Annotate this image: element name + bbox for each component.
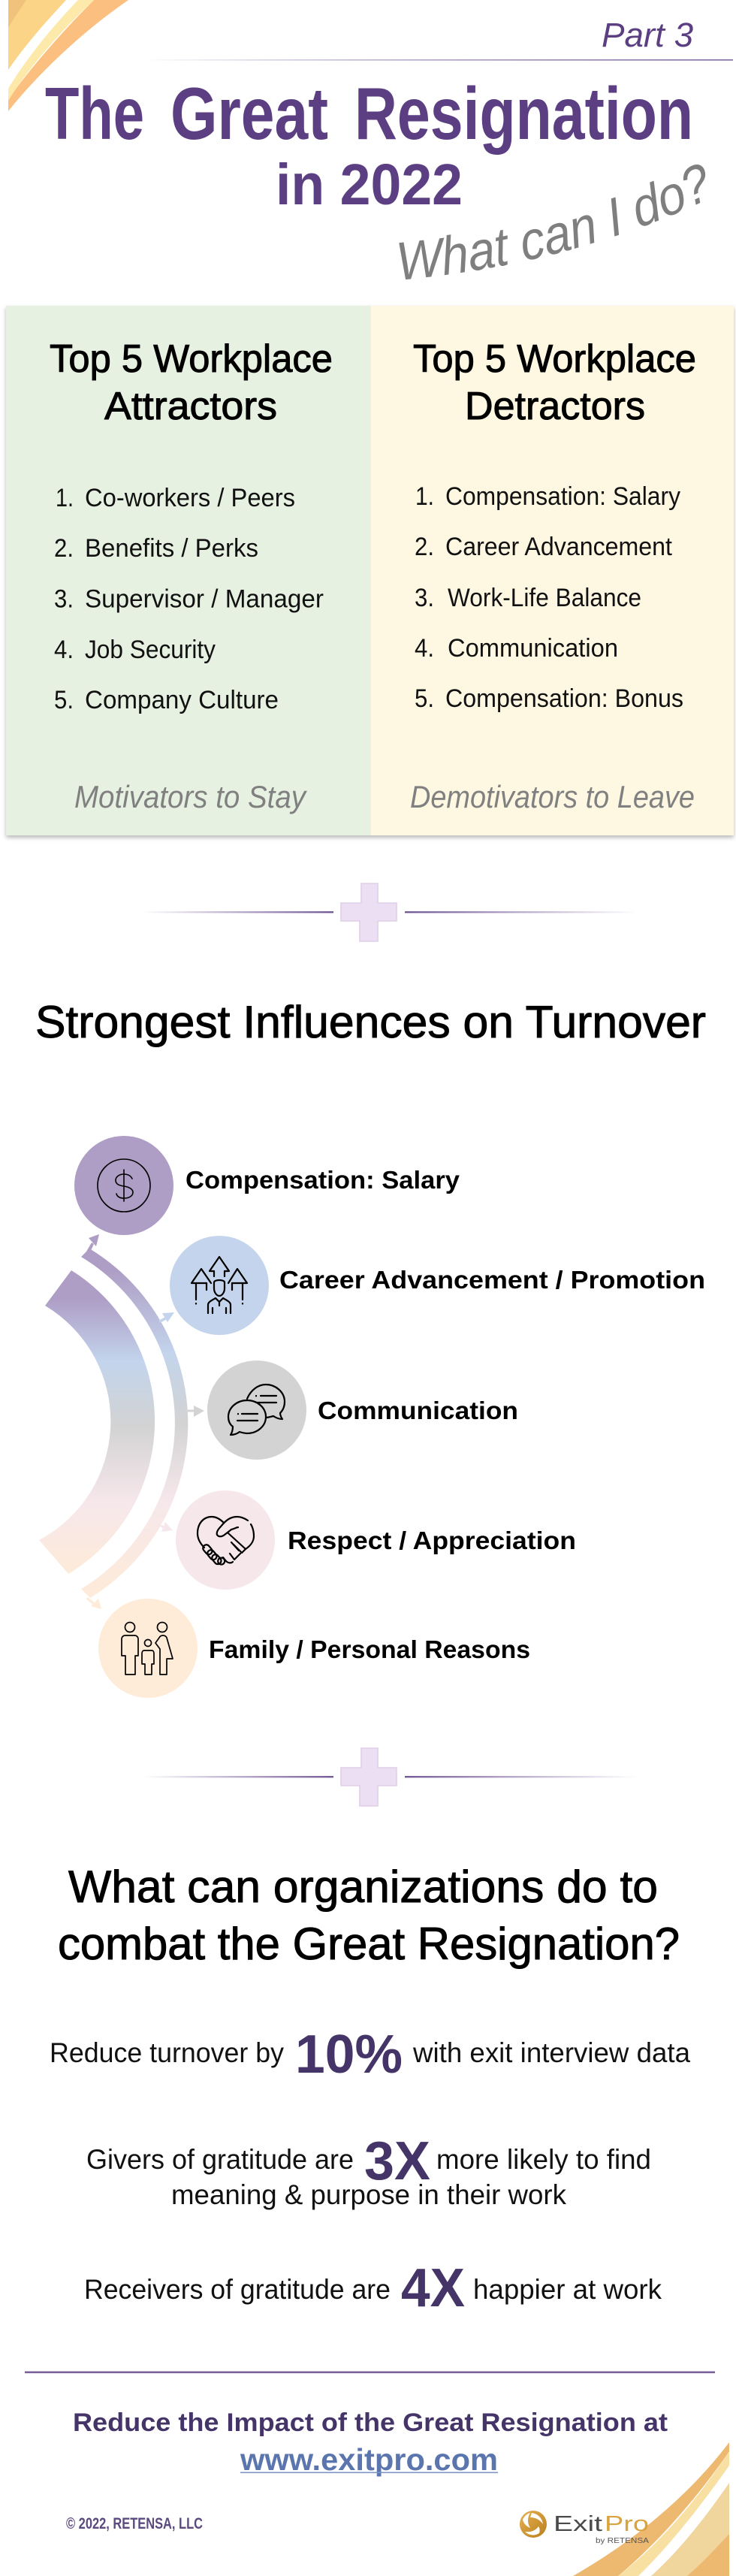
- arrow: to family: [86, 1597, 101, 1609]
- stat: reduce turnover by 10%: with exit interview data: [412, 2037, 690, 2068]
- thick arc: [39, 1270, 155, 1574]
- icon: logo mark: [520, 2511, 547, 2538]
- logo: ExitPro by Retensa: [520, 2511, 649, 2545]
- item: career advancement: Career Advancement / Promotion: [279, 1266, 705, 1294]
- item: communication: [207, 1360, 518, 1460]
- panel: detractors text: Work-Life Balance: [448, 584, 641, 612]
- stat: receivers of gratitude 4X: 4X: [401, 2258, 465, 2318]
- panel: attractors text: Job Security: [85, 636, 216, 664]
- icon: person with rising arrows: [192, 1257, 247, 1313]
- call to action: www.exitpro.com: [240, 2442, 498, 2477]
- title: [45, 72, 693, 217]
- item: respect appreciation: [176, 1490, 576, 1590]
- text: Part 3: Part 3: [602, 16, 693, 54]
- item: family personal reasons: Family / Personal Reasons: [209, 1635, 530, 1663]
- item: compensation salary: Compensation: Salary: [186, 1166, 460, 1194]
- title: in 2022: [276, 153, 463, 217]
- panel: detractors text: Compensation: Bonus: [445, 684, 683, 713]
- arrow: to communication: [188, 1406, 204, 1417]
- decorative rule under part label: [143, 59, 733, 61]
- panel: attractors text: Company Culture: [85, 686, 279, 714]
- call to action: Reduce the Impact of the Great Resignation at: [73, 2408, 668, 2437]
- panel: attractors text: 4.: [54, 636, 74, 664]
- thin arc: [81, 1249, 188, 1598]
- panel: detractors text: Top 5 Workplace: [413, 337, 696, 381]
- panel: attractors text: Benefits / Perks: [85, 534, 258, 563]
- panel: attractors text: 2.: [54, 534, 74, 563]
- panel: attractors text: Top 5 Workplace: [50, 337, 333, 381]
- panel: detractors text: Career Advancement: [445, 533, 673, 561]
- divider line: [25, 2371, 715, 2373]
- panel: detractors text: Detractors: [465, 385, 645, 428]
- divider: plus one: [143, 883, 637, 941]
- stat: receivers of gratitude 4X: happier at work: [473, 2274, 662, 2305]
- panel: detractors text: Demotivators to Leave: [410, 779, 695, 814]
- stat: givers of gratitude 3X: more likely to find: [436, 2144, 651, 2175]
- stat: givers of gratitude 3X: Givers of gratitude are: [86, 2144, 354, 2175]
- stat: reduce turnover by 10%: Reduce turnover by: [50, 2037, 284, 2068]
- item: respect appreciation: Respect / Appreciation: [288, 1527, 576, 1554]
- heading: what can organizations do: [58, 1862, 680, 1969]
- stat: receivers of gratitude 4X: Receivers of gratitude are: [84, 2274, 391, 2305]
- divider: plus two: [143, 1748, 637, 1806]
- arrow: to career: [158, 1312, 174, 1323]
- panel: attractors text: 3.: [54, 584, 74, 613]
- panel: detractors text: 2.: [415, 533, 434, 561]
- panel: detractors background: [371, 306, 734, 835]
- panel: attractors text: [50, 337, 333, 814]
- heading: strongest influences: Strongest Influences on Turnover: [35, 997, 706, 1047]
- panel: detractors text: 3.: [415, 584, 434, 612]
- stat: givers of gratitude 3X: meaning & purpose in their work: [171, 2179, 566, 2210]
- arrow: to compensation: [86, 1234, 99, 1254]
- panel: attractors text: Attractors: [104, 385, 277, 428]
- panel: detractors text: 5.: [415, 684, 434, 713]
- panel: attractors text: 1.: [56, 484, 74, 512]
- panel: attractors and detractors: [6, 306, 734, 835]
- item: career advancement: [170, 1236, 705, 1335]
- panel: attractors text: Motivators to Stay: [74, 779, 308, 814]
- stat: givers of gratitude 3X: 3X: [364, 2131, 430, 2191]
- decoration: bottom-right corner swoosh: [573, 2442, 729, 2576]
- logo: ExitPro by Retensa: by RETENSA: [596, 2536, 649, 2545]
- panel: detractors text: 1.: [415, 482, 434, 511]
- arrow: to respect: [156, 1522, 173, 1532]
- call to action: [73, 2408, 668, 2477]
- decoration: top-left corner swoosh: [8, 0, 128, 111]
- icon: dollar coin: [98, 1159, 150, 1212]
- item: communication: Communication: [318, 1397, 518, 1424]
- heading: what can organizations do: What can organizations do to: [68, 1862, 658, 1912]
- panel: attractors text: Supervisor / Manager: [85, 584, 324, 613]
- title: Great: [170, 72, 328, 155]
- icon: family: [122, 1623, 173, 1675]
- heading: what can organizations do: combat the Great Resignation?: [58, 1919, 680, 1969]
- item: family personal reasons: [98, 1599, 530, 1698]
- stat: reduce turnover by 10%: [50, 2025, 690, 2085]
- panel: attractors text: 5.: [54, 686, 74, 714]
- stat: receivers of gratitude 4X: [84, 2258, 662, 2318]
- copyright: © 2022, RETENSA, LLC: [66, 2515, 203, 2532]
- stat: reduce turnover by 10%: 10%: [295, 2025, 403, 2085]
- panel: detractors text: [410, 337, 696, 814]
- chart: influences arc diagram: [39, 1136, 705, 1698]
- title: The: [45, 72, 144, 155]
- panel: attractors text: Co-workers / Peers: [85, 484, 295, 512]
- logo: ExitPro by Retensa: Pro: [605, 2512, 649, 2536]
- panel: detractors text: Communication: [448, 634, 618, 663]
- logo: ExitPro by Retensa: Exit: [554, 2512, 602, 2536]
- panel: detractors text: 4.: [415, 634, 434, 663]
- item: compensation salary: [74, 1136, 460, 1235]
- icon: speech bubbles: [228, 1385, 285, 1435]
- icon: heart handshake: [198, 1517, 254, 1566]
- panel: detractors text: Compensation: Salary: [445, 482, 680, 511]
- stat: givers of gratitude 3X: [86, 2131, 651, 2210]
- subtitle: What can I do?: What can I do?: [399, 165, 706, 279]
